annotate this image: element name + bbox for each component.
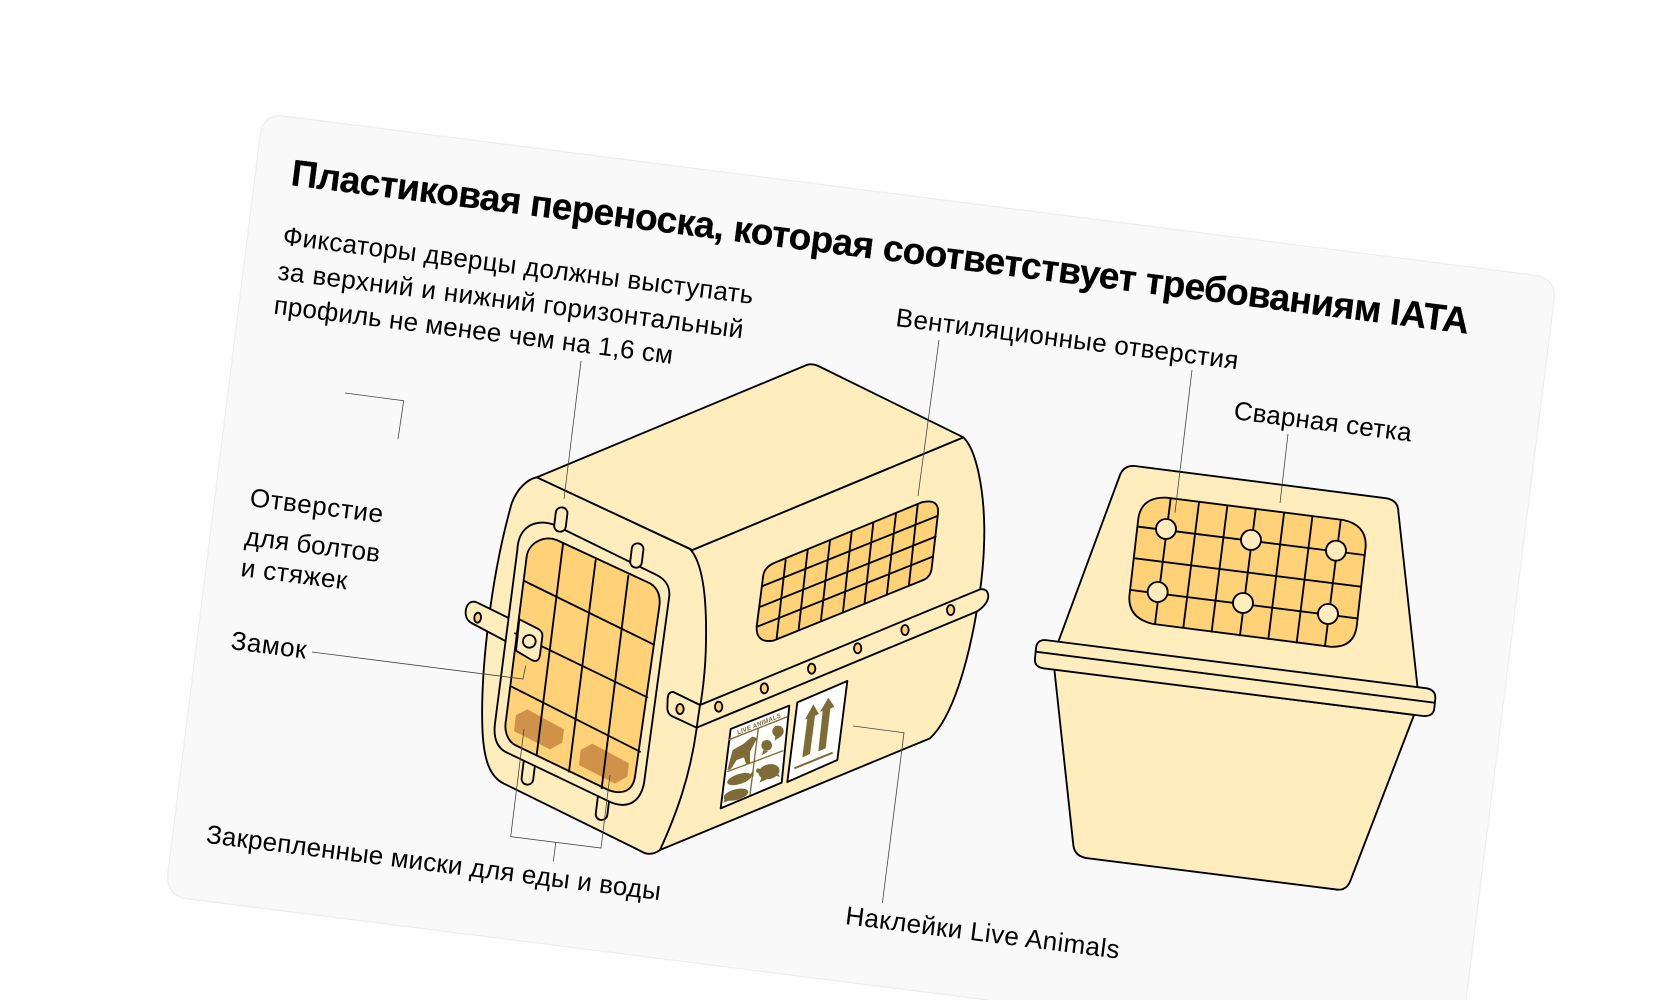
door frame	[495, 523, 669, 805]
leader: side vents	[918, 340, 939, 496]
label: ventilation: Вентиляционные отверстия	[894, 302, 1240, 375]
panel: tilted card background	[168, 116, 1554, 1000]
label: welded mesh: Сварная сетка	[1232, 395, 1414, 447]
food bowl	[514, 709, 564, 749]
label: bowls: Закрепленные миски для еды и воды	[205, 819, 663, 906]
door lock	[516, 619, 542, 661]
leader: stickers	[853, 726, 904, 903]
label: door latches	[272, 221, 755, 370]
left bolt tab	[466, 602, 511, 642]
leader: bowls	[511, 729, 610, 862]
lower shell	[1054, 669, 1414, 890]
icon: dog	[727, 737, 757, 770]
carrier front face	[482, 477, 706, 854]
sticker: this way up arrows	[787, 681, 847, 782]
mesh bolts	[1148, 519, 1346, 624]
label: door latches: за верхний и нижний горизонтальный	[276, 256, 745, 344]
side strap with bolt holes	[667, 589, 988, 728]
label: lock: Замок	[229, 625, 309, 665]
title: Пластиковая переноска, которая соответствует требованиям IATA	[289, 152, 1472, 342]
carrier top and side shell	[537, 364, 984, 850]
label: bolt holes: и стяжек	[239, 552, 350, 595]
leader: right vents	[1175, 370, 1192, 513]
door window	[505, 539, 660, 792]
icon: fish	[722, 770, 754, 803]
label: bolt holes: для болтов	[243, 521, 382, 568]
water bowl	[579, 744, 629, 784]
icon: chicks	[761, 726, 784, 755]
side ventilation mesh	[757, 501, 938, 641]
leader lines	[312, 340, 1288, 903]
label: bolt holes: Отверстие	[248, 482, 385, 529]
illustration: carrier, side view	[1035, 466, 1435, 890]
label: door latches: Фиксаторы дверцы должны выступать	[281, 221, 755, 310]
stickers on carrier side	[721, 681, 847, 808]
label: stickers: Наклейки Live Animals	[844, 900, 1121, 965]
sticker: Live Animals: LIVE ANIMALS	[736, 712, 783, 737]
leader: bolt holes	[345, 393, 404, 439]
welded mesh window	[1129, 498, 1366, 647]
top door pins	[554, 507, 644, 568]
rim	[1035, 640, 1435, 716]
label: door latches: профиль не менее чем на 1,6 см	[272, 290, 675, 370]
leader: mesh	[1280, 434, 1288, 503]
leader: door latches	[564, 361, 581, 499]
icon: turtle	[756, 762, 781, 783]
upper shell	[1054, 466, 1418, 707]
bottom door pins	[521, 756, 610, 821]
leader: lock	[312, 652, 526, 679]
label: bolt holes	[239, 482, 385, 595]
door grid	[512, 544, 653, 788]
illustration: carrier, three-quarter view	[466, 364, 988, 854]
